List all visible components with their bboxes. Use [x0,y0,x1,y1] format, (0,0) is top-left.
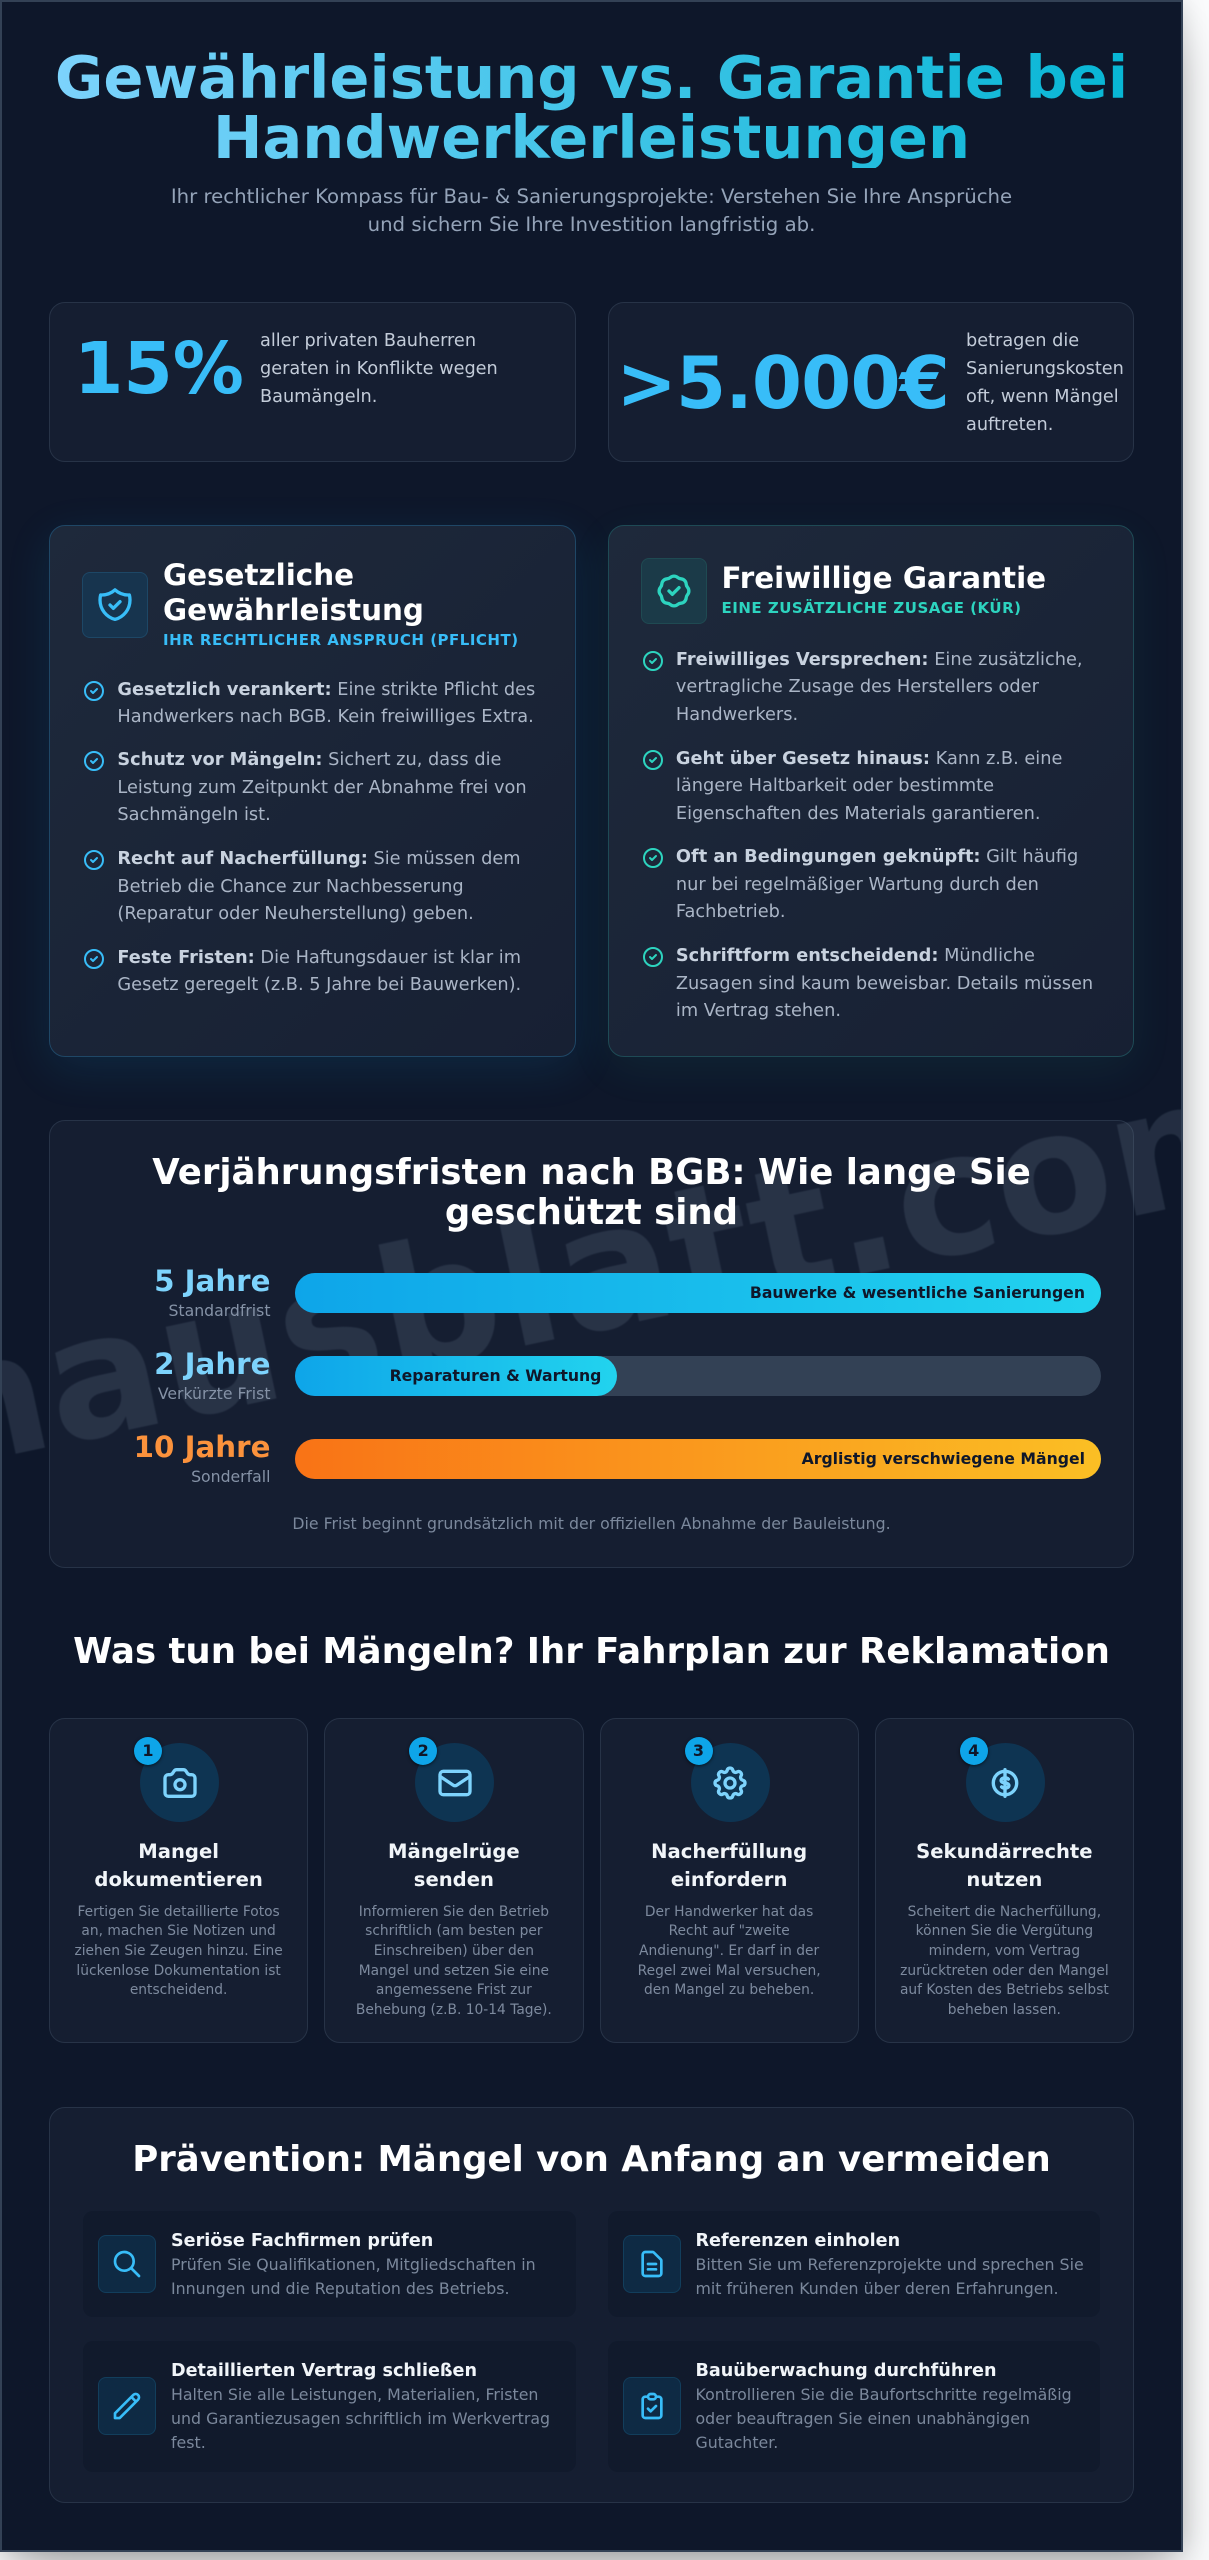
stat text: oft, wenn Mängel [966,387,1119,407]
step text: entscheidend. [130,1982,227,1998]
step text: ziehen Sie Zeugen hinzu. Eine [74,1943,283,1959]
list item [643,748,1062,824]
item text: Bauüberwachung durchführen [696,2360,996,2380]
list item [643,650,1083,725]
icon: mail: 2 [418,1741,429,1760]
list item: (Reparatur oder Neuherstellung) geben. [117,904,474,924]
step 1 [49,1718,308,2043]
note: Die Frist beginnt grundsätzlich mit der offiziellen Abnahme der Bauleistung. [292,1514,891,1532]
list item: Geht über Gesetz hinaus: Kann z.B. eine [676,748,1062,768]
list item: nur bei regelmäßiger Wartung durch den [676,875,1039,895]
step title: nutzen [966,1868,1042,1890]
item text: Prüfen Sie Qualifikationen, Mitgliedschaften in [171,2255,536,2274]
icon: currency [966,1743,1045,1822]
icon: document [622,2235,680,2293]
list item [643,946,1093,1021]
list item: Feste Fristen: Die Haftungsdauer ist klar im [117,948,521,968]
step text: an, machen Sie Notizen und [81,1923,276,1939]
step title: dokumentieren [94,1868,263,1890]
item text [696,2230,1084,2298]
item text: Innungen und die Reputation des Betriebs. [171,2279,510,2298]
step title: senden [414,1868,494,1890]
icon: clipboard [622,2377,680,2435]
list item: Zusagen sind kaum beweisbar. Details müssen [676,974,1093,994]
step title: Sekundärrechte [916,1840,1093,1863]
step title [651,1840,807,1890]
section heading: Verjährungsfristen nach BGB: Wie lange Sie [152,1152,1031,1193]
subtitle: Ihr rechtlicher Kompass für Bau- & Sanierungsprojekte: Verstehen Sie Ihre Ansprüche [171,185,1012,208]
step text: angemessene Frist zur [376,1982,532,1998]
list item: Schriftform entscheidend: Mündliche [676,946,1035,966]
list item: Schutz vor Mängeln: Sichert zu, dass die [117,750,501,770]
section heading: geschützt sind [445,1192,738,1233]
item text: Referenzen einholen [696,2230,900,2250]
heading: Gewährleistung [163,593,424,627]
panel: praevention [49,2107,1134,2503]
step text: Mangel und setzen Sie eine [359,1963,549,1979]
stat text: Baumängeln. [260,387,377,407]
row sublabel: Standardfrist [168,1301,270,1320]
list item: Eigenschaften des Materials garantieren. [676,804,1040,824]
stat text: Sanierungskosten [966,359,1124,379]
row sublabel: Sonderfall [191,1467,270,1486]
item text [696,2360,1072,2452]
stat text: aller privaten Bauherren [260,331,476,351]
item text: Kontrollieren Sie die Baufortschritte regelmäßig [696,2385,1072,2404]
panel: verjaehrungsfristen [49,1120,1134,1568]
step title [94,1840,263,1890]
step text: beheben lassen. [948,2002,1061,2018]
step text: Scheitert die Nacherfüllung, [908,1904,1101,1920]
step text: den Mangel zu beheben. [644,1982,814,1998]
row sublabel: Verkürzte Frist [158,1384,270,1403]
bar: 10 Jahre: Arglistig verschwiegene Mängel [802,1449,1085,1468]
item text: Detaillierten Vertrag schließen [171,2360,477,2380]
icon: camera: 1 [142,1741,154,1760]
icon: camera [140,1743,219,1822]
heading: Freiwillige Garantie [722,561,1046,595]
step text: auf Kosten des Betriebs selbst [900,1982,1109,1998]
list item: Betrieb die Chance zur Nachbesserung [117,877,464,897]
heading: Gesetzliche [163,558,354,592]
title: Gewährleistung vs. Garantie bei [55,43,1128,112]
stat text [260,331,498,407]
section heading [152,1152,1031,1233]
stat text: auftreten. [966,415,1053,435]
subheading: EINE ZUSÄTZLICHE ZUSAGE (KÜR) [722,599,1021,617]
list item [84,680,535,727]
list item: Freiwilliges Versprechen: Eine zusätzliche, [676,650,1083,670]
icon: shield [82,572,148,638]
icon: search [98,2235,156,2293]
panel: freiwillige garantie [608,525,1134,1057]
step text [356,1904,552,2018]
step title: einfordern [671,1868,787,1890]
item: referenzen [608,2211,1100,2317]
list item: Gesetzlich verankert: Eine strikte Pflicht des [117,680,535,700]
stat card: 5000 euro [608,302,1134,462]
stat text: betragen die [966,331,1079,351]
list item: Fachbetrieb. [676,902,786,922]
item: fachfirmen [83,2211,576,2317]
icon: currency: 4 [968,1741,979,1760]
list item: längere Haltbarkeit oder bestimmte [676,776,994,796]
list item [84,849,521,924]
step 4 [875,1718,1134,2043]
step title [916,1840,1093,1890]
item text: mit früheren Kunden über deren Erfahrungen. [696,2279,1059,2298]
list item [643,847,1078,922]
header [55,43,1128,236]
stat number: >5.000€ [616,341,949,425]
step text: Der Handwerker hat das [645,1904,813,1920]
step text: Andienung". Er darf in der [639,1943,819,1959]
list item: Gesetz geregelt (z.B. 5 Jahre bei Bauwerken). [117,975,521,995]
title: Handwerkerleistungen [213,103,970,172]
list item [84,750,527,825]
step text: können Sie die Vergütung [916,1923,1093,1939]
step text: Einschreiben) über den [374,1943,534,1959]
stat card: 15% [49,302,576,462]
step text: Regel zwei Mal versuchen, [638,1963,821,1979]
subtitle [171,185,1012,236]
step text: Informieren Sie den Betrieb [359,1904,549,1920]
section heading: maengel: Was tun bei Mängeln? Ihr Fahrplan zur Reklamation [73,1630,1110,1672]
item text [171,2230,536,2298]
bar: 5 Jahre [295,1273,1101,1313]
step text: mindern, vom Vertrag [929,1943,1080,1959]
icon: gear: 3 [693,1741,704,1760]
item text: Seriöse Fachfirmen prüfen [171,2230,433,2250]
step title [388,1840,520,1890]
step text: Behebung (z.B. 10-14 Tage). [356,2002,552,2018]
item text: und Garantiezusagen schriftlich im Werkvertrag [171,2409,550,2428]
step text [638,1904,821,1998]
list item: im Vertrag stehen. [676,1001,841,1021]
step text: Fertigen Sie detaillierte Fotos [78,1904,280,1920]
icon: gear [690,1743,770,1822]
item text: fest. [171,2433,206,2452]
list item: Handwerkers nach BGB. Kein freiwilliges Extra. [117,707,534,727]
list item: vertragliche Zusage des Herstellers oder [676,677,1039,697]
step text [900,1904,1109,2018]
step text: zurücktreten oder den Mangel [900,1963,1109,1979]
step text [74,1904,283,1998]
item text [171,2360,550,2452]
item: bauueberwachung [608,2341,1100,2472]
step text: lückenlose Dokumentation ist [76,1963,281,1979]
list item: Oft an Bedingungen geknüpft: Gilt häufig [676,847,1078,867]
list item: Sachmängeln ist. [117,805,271,825]
item text: oder beauftragen Sie einen unabhängigen [696,2409,1030,2428]
step title: Nacherfüllung [651,1840,807,1863]
list item: Handwerkers. [676,705,798,725]
step text: schriftlich (am besten per [365,1923,543,1939]
item text: Gutachter. [696,2433,778,2452]
stat text: geraten in Konflikte wegen [260,359,498,379]
panel: gesetzliche gewaehrleistung [49,525,576,1057]
step 2 [324,1718,584,2043]
row label: 10 Jahre: 10 Jahre [134,1430,270,1464]
bar: 2 Jahre: Reparaturen & Wartung [390,1366,601,1385]
item text: Halten Sie alle Leistungen, Materialien, Fristen [171,2385,538,2404]
icon: pencil [98,2377,156,2435]
list item [84,948,521,995]
icon: badge [640,558,706,624]
heading [163,558,424,627]
subtitle: und sichern Sie Ihre Investition langfristig ab. [368,213,815,236]
bar: 5 Jahre: Bauwerke & wesentliche Sanierungen [750,1283,1085,1302]
step title: Mangel [138,1840,219,1863]
item text: Bitten Sie um Referenzprojekte und sprechen Sie [696,2255,1084,2274]
row label: 5 Jahre: 5 Jahre [154,1264,270,1298]
title [49,48,1134,168]
step 3 [600,1718,859,2043]
row label: 2 Jahre: 2 Jahre [154,1347,270,1381]
bar: 2 Jahre [295,1356,1101,1396]
bar: 10 Jahre [295,1439,1101,1479]
chart: verjaehrungsfristen [134,1152,1101,1532]
stat text [966,331,1124,435]
section heading: Prävention: Mängel von Anfang an vermeiden [132,2138,1051,2180]
item: vertrag [83,2341,576,2472]
step title: Mängelrüge [388,1840,520,1863]
icon: mail [415,1743,494,1822]
step text: Recht auf "zweite [669,1923,790,1939]
list item: Leistung zum Zeitpunkt der Abnahme frei von [117,778,527,798]
stat number: 15% [74,327,244,410]
list item: Recht auf Nacherfüllung: Sie müssen dem [117,849,521,869]
subheading: IHR RECHTLICHER ANSPRUCH (PFLICHT) [163,631,519,649]
